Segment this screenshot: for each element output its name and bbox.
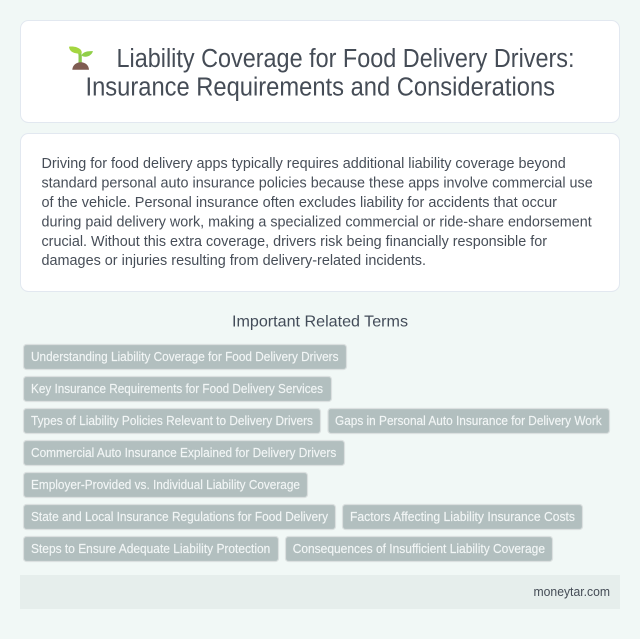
tag: Understanding Liability Coverage for Food Delivery Drivers	[31, 350, 338, 364]
tag: Gaps in Personal Auto Insurance for Delivery Work	[335, 414, 602, 428]
description text: standard personal auto insurance policies because these apps involve commercial use	[42, 176, 593, 192]
tag	[328, 408, 610, 434]
description text: Driving for food delivery apps typically requires additional liability coverage beyond	[42, 156, 566, 172]
icon: seedling	[69, 46, 93, 70]
description text: damages or injuries resulting from delivery-related incidents.	[42, 253, 426, 269]
tag	[24, 472, 308, 498]
tag: Employer-Provided vs. Individual Liability Coverage	[31, 478, 300, 492]
tag: Steps to Ensure Adequate Liability Protection	[31, 542, 270, 556]
title line 1: Liability Coverage for Food Delivery Drivers:	[116, 45, 574, 73]
tag	[24, 536, 278, 562]
tag	[286, 536, 552, 562]
tag	[24, 376, 332, 402]
tag	[24, 408, 320, 434]
panel: title card	[20, 20, 620, 122]
footer source: moneytar.com	[534, 585, 610, 599]
tag: Consequences of Insufficient Liability Coverage	[293, 542, 545, 556]
tag: Factors Affecting Liability Insurance Costs	[350, 510, 575, 524]
description text	[42, 156, 593, 269]
description text: crucial. Without this extra coverage, drivers risk being financially responsible for	[42, 234, 547, 250]
tag	[24, 440, 344, 466]
panel: description card	[20, 134, 620, 292]
tag	[24, 344, 346, 370]
tag: Commercial Auto Insurance Explained for Delivery Drivers	[31, 446, 336, 460]
tag: State and Local Insurance Regulations for Food Delivery	[31, 510, 329, 524]
panel: related term tags	[24, 344, 610, 562]
heading: important related terms: Important Related Terms	[232, 314, 408, 330]
tag	[342, 504, 582, 530]
tag: Key Insurance Requirements for Food Delivery Services	[31, 382, 323, 396]
title line 2: Insurance Requirements and Considerations	[86, 74, 555, 102]
description text: during paid delivery work, making a specialized commercial or ride-share endorsement	[42, 214, 592, 230]
tag	[24, 504, 336, 530]
footer	[20, 575, 620, 609]
description text: of the vehicle. Personal insurance often excludes liability for accidents that occur	[42, 195, 557, 211]
tag: Types of Liability Policies Relevant to Delivery Drivers	[31, 414, 313, 428]
